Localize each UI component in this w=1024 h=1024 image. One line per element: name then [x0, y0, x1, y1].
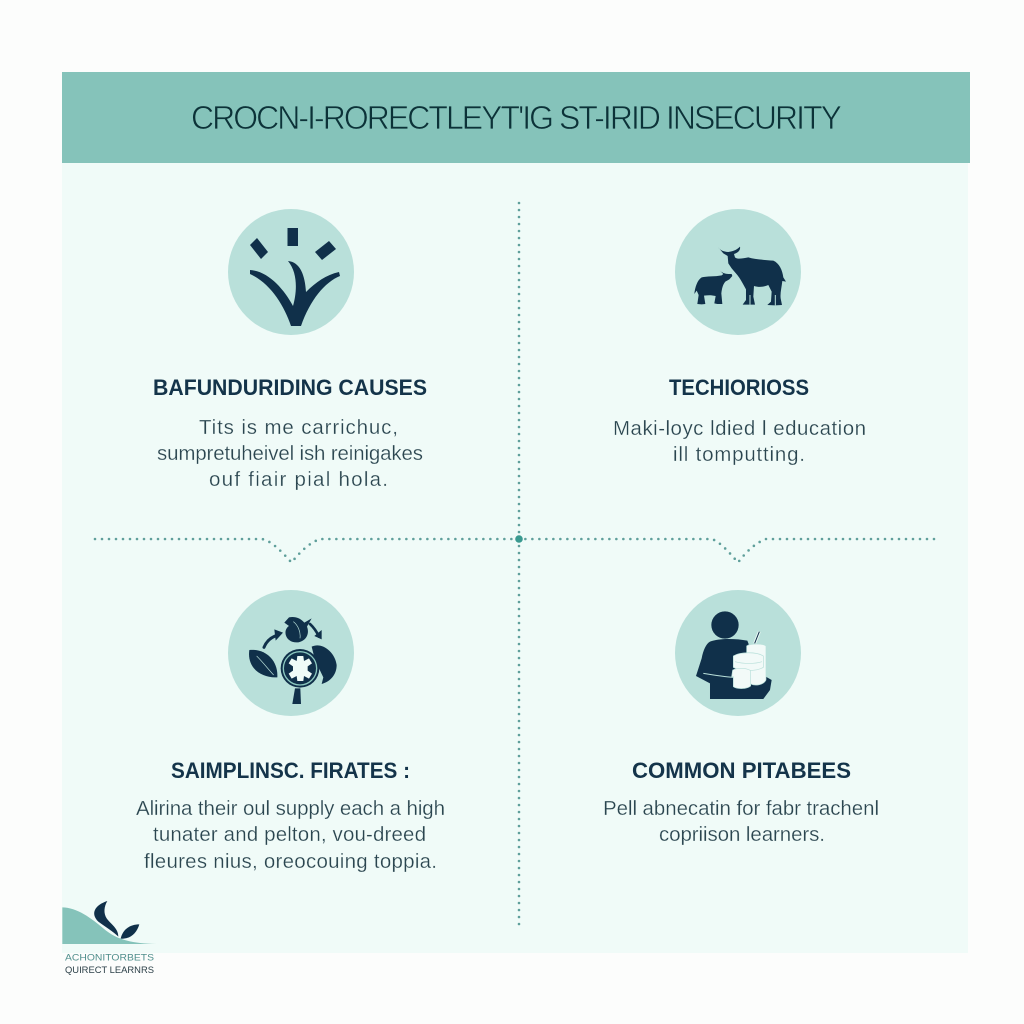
body text: Maki-loyc ldied l education: [613, 417, 866, 440]
header banner: [62, 72, 970, 163]
icon: livestock: [675, 209, 801, 335]
body text: copriison learners.: [659, 823, 825, 846]
body text: Tits is me carrichuc,: [199, 416, 398, 439]
icon: sprouting plant: [228, 209, 354, 335]
logo mark: [62, 901, 157, 944]
heading: SAIMPLINSC. FIRATES :: [171, 758, 410, 783]
panel: bottom left: [136, 590, 445, 873]
icon: magnifier over food cycle: [228, 590, 354, 716]
panel: bottom right: [603, 590, 879, 846]
heading: BAFUNDURIDING CAUSES: [153, 375, 427, 400]
body text: sumpretuheivel ish reinigakes: [157, 442, 423, 465]
body text: [136, 797, 445, 873]
heading: TECHIORIOSS: [669, 375, 809, 400]
heading: COMMON PITABEES: [632, 758, 851, 783]
panel: content background: [62, 162, 968, 953]
title: CROCN-I-RORECTLEYT'IG ST-IRID INSECURITY: [191, 99, 842, 136]
panel: top right: [613, 209, 866, 466]
body text: [613, 417, 866, 466]
body text: Alirina their oul supply each a high: [136, 797, 445, 820]
body text: ill tomputting.: [673, 443, 805, 466]
body text: tunater and pelton, vou-dreed: [153, 823, 426, 846]
icon: person carrying containers: [675, 590, 801, 716]
logo: QUIRECT LEARNRS: [65, 965, 154, 976]
body text: ouf fiair pial hola.: [209, 468, 388, 491]
logo text: ACHONITORBETS: [65, 952, 154, 964]
panel: top left: [153, 209, 427, 491]
body text: [157, 416, 423, 491]
body text: Pell abnecatin for fabr trachenl: [603, 797, 879, 820]
logo: [62, 901, 157, 976]
divider centre dot: [515, 535, 523, 543]
body text: fleures nius, oreocouing toppia.: [144, 850, 437, 873]
body text: [603, 797, 879, 846]
horizontal dotted divider with notches: [95, 539, 937, 562]
vertical dotted divider: [518, 203, 520, 930]
